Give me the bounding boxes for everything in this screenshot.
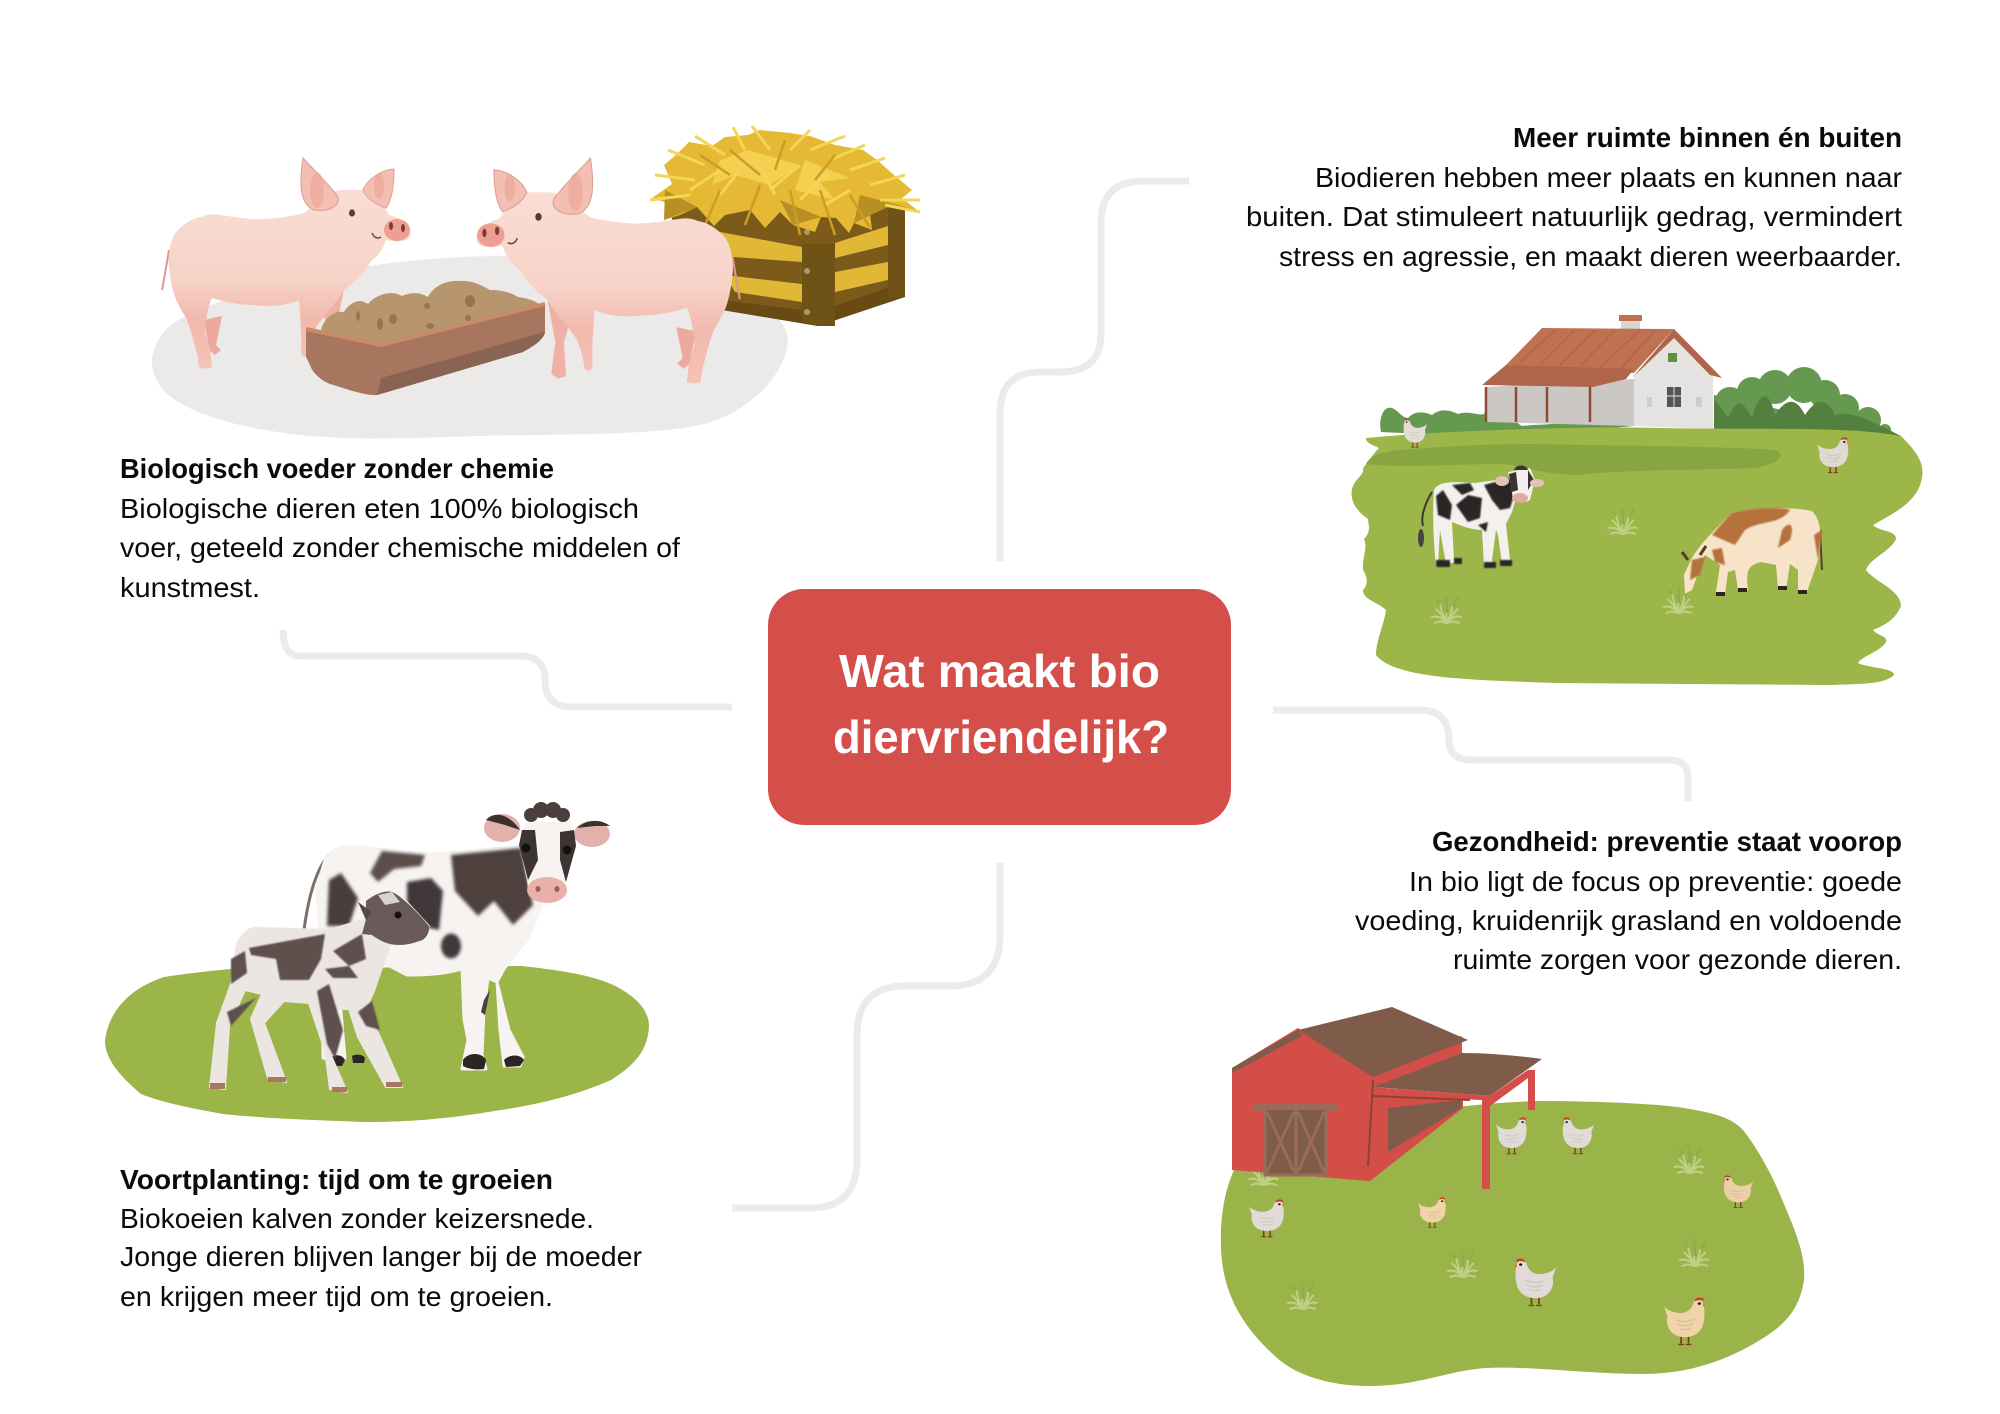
illustration: left pig	[162, 158, 410, 368]
connector: bottom to Voortplanting	[732, 863, 1000, 1208]
text: meer ruimte: stress en agressie, en maakt dieren weerbaarder.	[1279, 241, 1902, 272]
illustration: hay crate	[666, 205, 905, 326]
trees left	[1380, 402, 1634, 438]
ground blob: meadow	[1352, 427, 1923, 685]
illustration: red barn	[1232, 1007, 1542, 1189]
text: biologisch voeder: voer, geteeld zonder chemische middelen of	[120, 532, 680, 563]
panel: voortplanting	[105, 802, 649, 1312]
illustration: farmhouse	[1482, 315, 1722, 429]
text: gezondheid: voeding, kruidenrijk grasland en voldoende	[1355, 905, 1902, 936]
text: gezondheid: ruimte zorgen voor gezonde dieren.	[1453, 944, 1902, 975]
central title card: diervriendelijk?	[833, 711, 1169, 763]
ground blob: grey	[152, 256, 788, 439]
illustration: calf	[210, 891, 429, 1092]
text: voortplanting: en krijgen meer tijd om te groeien.	[120, 1281, 553, 1312]
text: biologisch voeder	[120, 453, 680, 603]
text: gezondheid: In bio ligt de focus op preventie: goede	[1409, 866, 1902, 897]
illustration: hay pile	[650, 126, 920, 235]
text: voortplanting	[120, 1164, 642, 1312]
grass tufts	[1432, 508, 1693, 623]
text: meer ruimte: Biodieren hebben meer plaats en kunnen naar	[1315, 162, 1902, 193]
text: meer ruimte: buiten. Dat stimuleert natuurlijk gedrag, vermindert	[1246, 201, 1902, 232]
text: gezondheid: Gezondheid: preventie staat voorop	[1432, 826, 1902, 857]
connector: top to Meer ruimte	[1000, 181, 1189, 561]
panel: biologisch voeder	[120, 126, 920, 603]
text: gezondheid	[1355, 826, 1902, 975]
text: meer ruimte	[1246, 122, 1902, 272]
panel: gezondheid	[1221, 826, 1902, 1386]
text: voortplanting: Jonge dieren blijven langer bij de moeder	[120, 1241, 642, 1272]
central title card: Wat maakt bio	[839, 645, 1160, 697]
central title card	[768, 589, 1231, 825]
connector: left to Biologisch voeder	[283, 630, 732, 707]
illustration: adult cow	[304, 802, 610, 1069]
ground blob: green	[105, 966, 649, 1122]
illustration: right pig	[477, 158, 740, 383]
text: biologisch voeder: kunstmest.	[120, 572, 260, 603]
chickens	[1249, 1117, 1753, 1345]
ground blob: chicken run	[1221, 1101, 1804, 1386]
illustration: feed trough	[306, 281, 545, 395]
text: biologisch voeder: Biologisch voeder zonder chemie	[120, 453, 554, 484]
text: voortplanting: Biokoeien kalven zonder keizersnede.	[120, 1203, 594, 1234]
trees right	[1714, 367, 1901, 436]
darker grass band	[1366, 444, 1781, 475]
grass tufts	[1249, 1147, 1709, 1309]
text: biologisch voeder: Biologische dieren eten 100% biologisch	[120, 493, 639, 524]
connector: right to Gezondheid	[1273, 710, 1688, 801]
chickens	[1403, 418, 1850, 473]
text: voortplanting: Voortplanting: tijd om te groeien	[120, 1164, 553, 1195]
panel: meer ruimte	[1246, 122, 1923, 685]
illustration: black and white cow	[1418, 466, 1544, 568]
text: meer ruimte: Meer ruimte binnen én buiten	[1513, 122, 1902, 153]
illustration: brown cow	[1682, 508, 1822, 596]
